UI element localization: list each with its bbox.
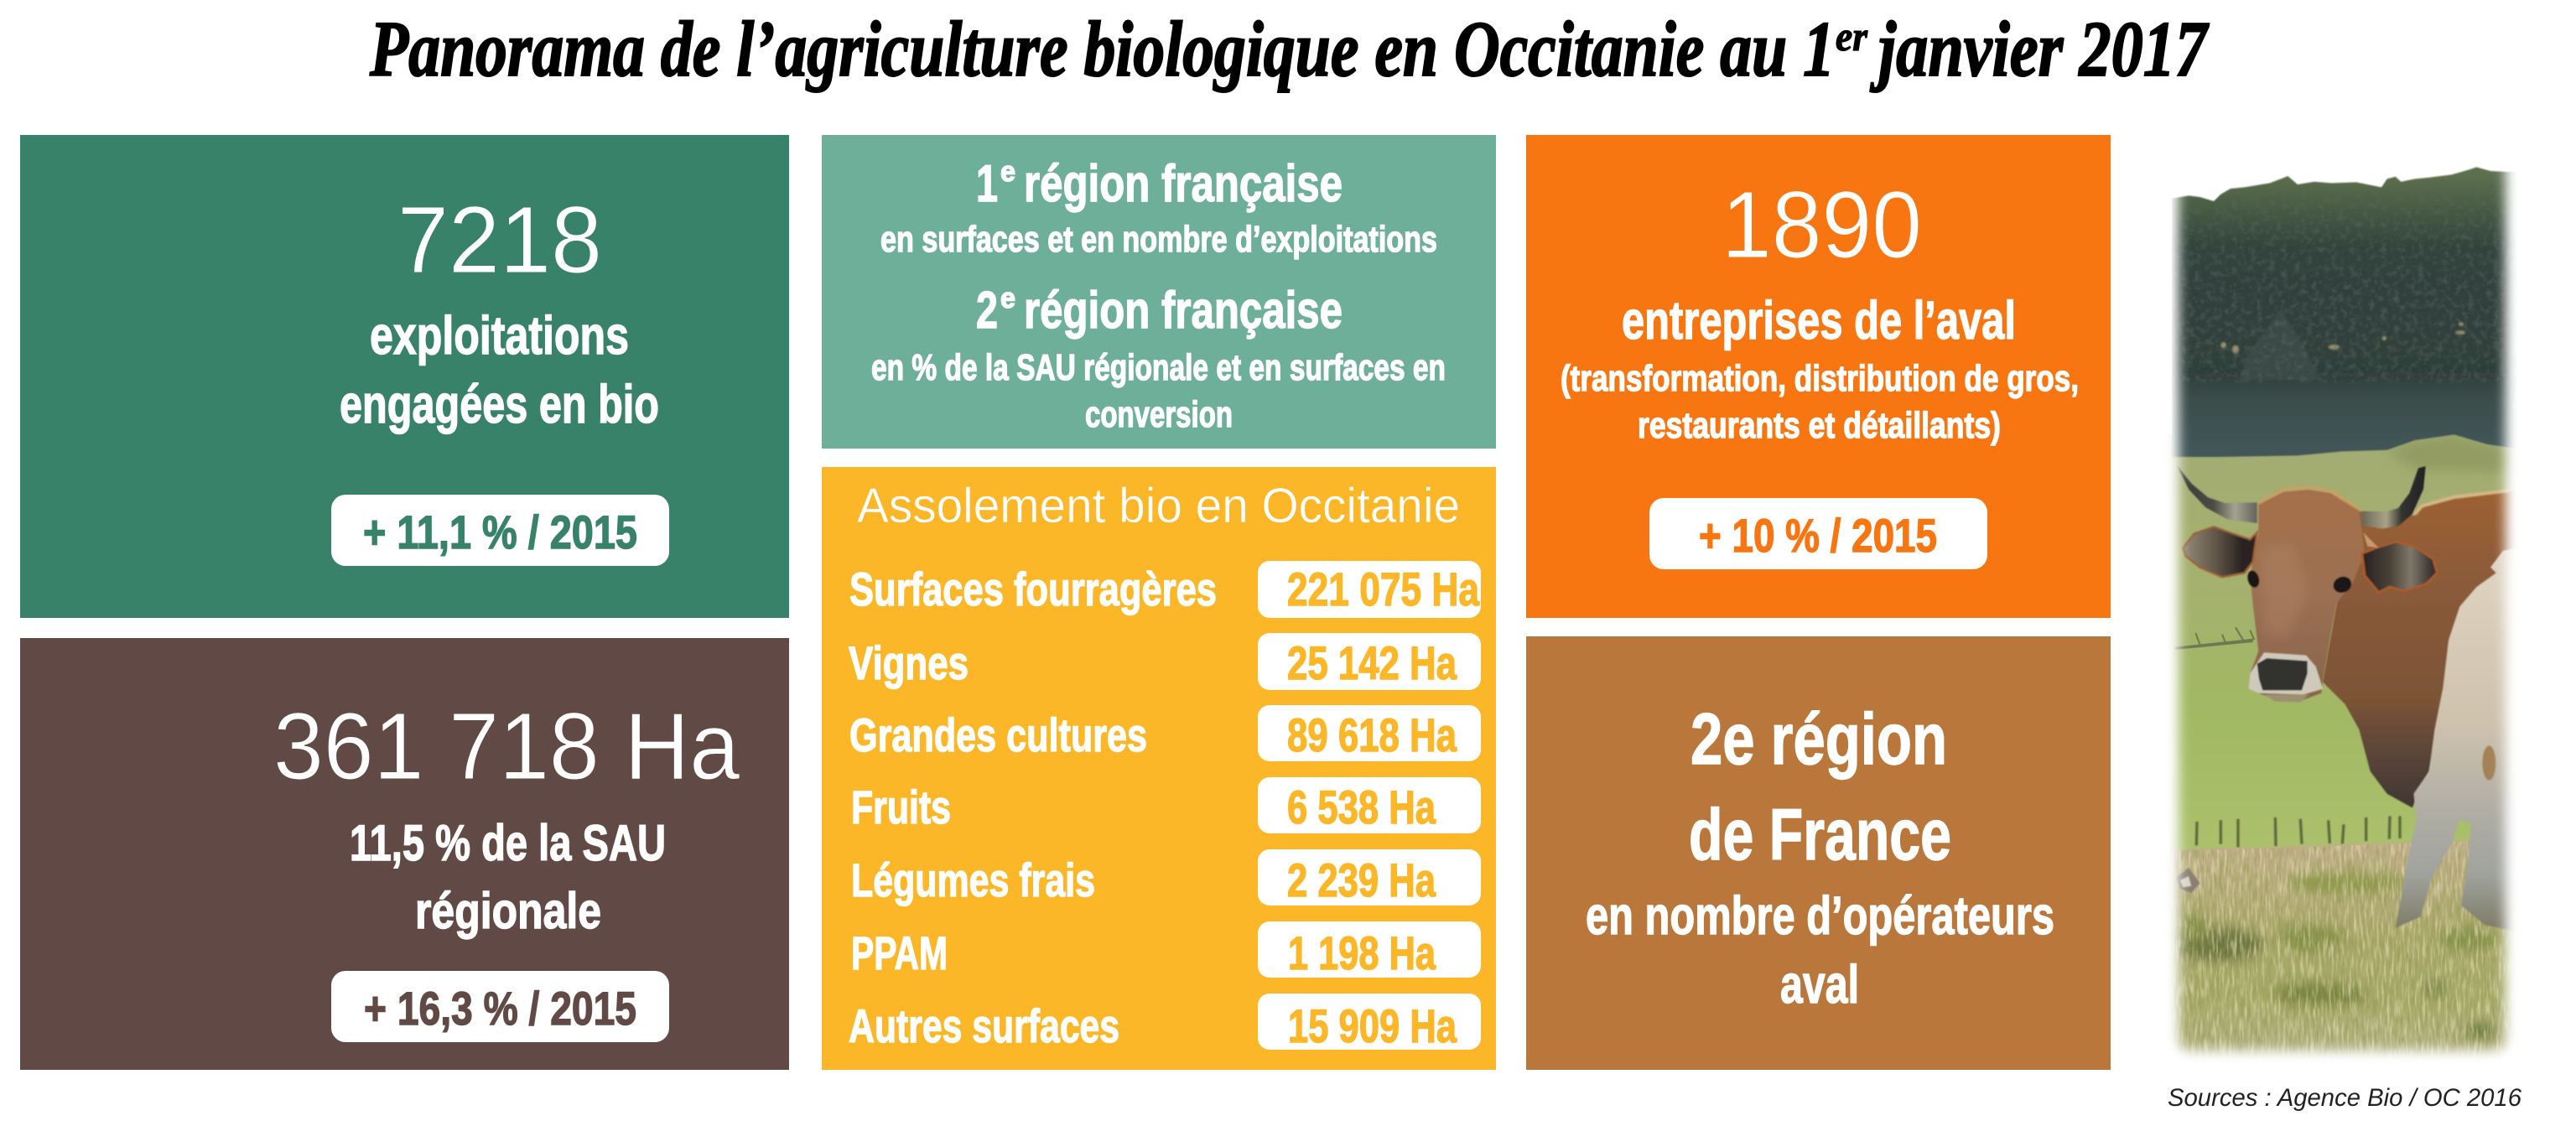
title: er: [1836, 13, 1867, 60]
row: fruits: [851, 777, 1481, 833]
row: légumes frais: Légumes frais: [851, 854, 1095, 906]
title: janvier 2017: [1869, 6, 2210, 93]
text: exploitations engagées en bio: [340, 305, 659, 434]
panel: surface hectares: [20, 638, 789, 1070]
row: grandes cultures: 89 618 Ha: [1287, 708, 1457, 761]
cow: eyes: [2246, 570, 2352, 594]
text: SAU et conversion: conversion: [1085, 394, 1233, 435]
text: surfaces et exploitations: en surfaces et en nombre d’exploitations: [880, 219, 1437, 260]
text: détail de l'aval: (transformation, distribution de gros,: [1561, 358, 2079, 399]
panel: entreprises de l'aval: [1526, 135, 2111, 618]
heading: 2e région française: 2: [976, 282, 998, 340]
text: détail de l'aval: restaurants et détaillants): [1638, 405, 2001, 446]
text: SAU et conversion: en % de la SAU régionale et en surfaces en: [871, 347, 1446, 388]
row: fruits: 6 538 Ha: [1287, 781, 1436, 833]
title: Panorama de l’agriculture biologique en Occitanie au 1: [369, 6, 1835, 93]
text: part de la SAU: [350, 815, 666, 939]
text: exploitations engagées en bio: exploitations: [370, 305, 629, 366]
heading: 1e région française: 1: [976, 155, 998, 213]
text: part de la SAU: 11,5 % de la SAU: [350, 815, 666, 871]
badge: +11,1 %: [331, 495, 669, 566]
row: autres surfaces: Autres surfaces: [849, 999, 1119, 1052]
photo background: fence: [2196, 816, 2400, 848]
row: autres surfaces: [849, 994, 1481, 1052]
row: PPAM: 1 198 Ha: [1288, 926, 1436, 979]
photo background: tree line: [2172, 166, 2516, 458]
row: autres surfaces: 15 909 Ha: [1288, 999, 1457, 1052]
heading: 2e région de France: de France: [1689, 795, 1951, 875]
row: vignes: 25 142 Ha: [1287, 636, 1457, 689]
panel: assolement bio: [822, 467, 1496, 1070]
cow: right horn: [2362, 466, 2426, 529]
heading: assolement: Assolement bio en Occitanie: [857, 479, 1460, 533]
cow: muzzle: [2249, 652, 2323, 702]
badge: +11,1 %: + 11,1 % / 2015: [363, 506, 637, 558]
row: surfaces fourragères: [849, 561, 1481, 618]
cow: left horn: [2177, 465, 2257, 523]
source note: Sources : Agence Bio / OC 2016: [2168, 1084, 2521, 1112]
big number: 361 718 Ha: 361 718 Ha: [273, 693, 740, 799]
heading: 1e région française: région française: [1024, 155, 1343, 213]
text: en nombre d'opérateurs aval: en nombre d’opérateurs: [1586, 885, 2054, 946]
heading: 2e région française: région française: [1024, 282, 1343, 340]
text: détail de l'aval: [1561, 358, 2079, 446]
text: en nombre d'opérateurs aval: [1586, 885, 2054, 1014]
row: légumes frais: [851, 849, 1481, 906]
cow: brown body and neck: [2323, 489, 2527, 807]
panel: opérateurs aval: [1526, 636, 2111, 1070]
row: PPAM: [851, 921, 1481, 979]
row: fruits: Fruits: [851, 781, 951, 833]
row: surfaces fourragères: 221 075 Ha: [1287, 563, 1480, 615]
panel: exploitations: [20, 135, 789, 618]
cow: left ear: [2183, 527, 2257, 577]
panel: classement régional: [822, 135, 1496, 449]
photo background: dry grass: [2169, 840, 2515, 1060]
big number: 1890: 1890: [1722, 172, 1922, 278]
photo background: pasture: [2169, 433, 2515, 850]
badge: +10 %: + 10 % / 2015: [1699, 509, 1937, 562]
heading: 2e région de France: [1689, 699, 1951, 875]
cow: right ear: [2362, 542, 2438, 593]
badge: +16,3 %: [331, 971, 669, 1042]
row: vignes: [849, 633, 1481, 690]
cow: head: [2177, 465, 2510, 702]
row: grandes cultures: [849, 705, 1481, 761]
row: grandes cultures: Grandes cultures: [849, 708, 1147, 761]
cow: white cow in foreground: [2395, 548, 2514, 930]
heading: 1e région française: e: [1000, 156, 1015, 188]
text: part de la SAU: régionale: [415, 883, 601, 939]
heading: entreprises de l'aval: entreprises de l’aval: [1622, 290, 2016, 350]
heading: 2e région de France: 2e région: [1690, 699, 1947, 780]
heading: 2e région française: e: [1000, 283, 1015, 314]
row: légumes frais: 2 239 Ha: [1287, 854, 1436, 906]
badge: +16,3 %: + 16,3 % / 2015: [364, 982, 636, 1035]
text: exploitations engagées en bio: engagées en bio: [340, 374, 659, 434]
text: en nombre d'opérateurs aval: aval: [1780, 954, 1859, 1014]
text: SAU et conversion: [871, 347, 1446, 435]
big number: 7218: 7218: [397, 187, 602, 293]
row: vignes: Vignes: [849, 636, 969, 689]
row: surfaces fourragères: Surfaces fourragères: [849, 563, 1217, 615]
badge: +10 %: [1649, 498, 1987, 569]
row: PPAM: PPAM: [851, 926, 948, 979]
photo: cow in pasture: [2169, 166, 2516, 1060]
